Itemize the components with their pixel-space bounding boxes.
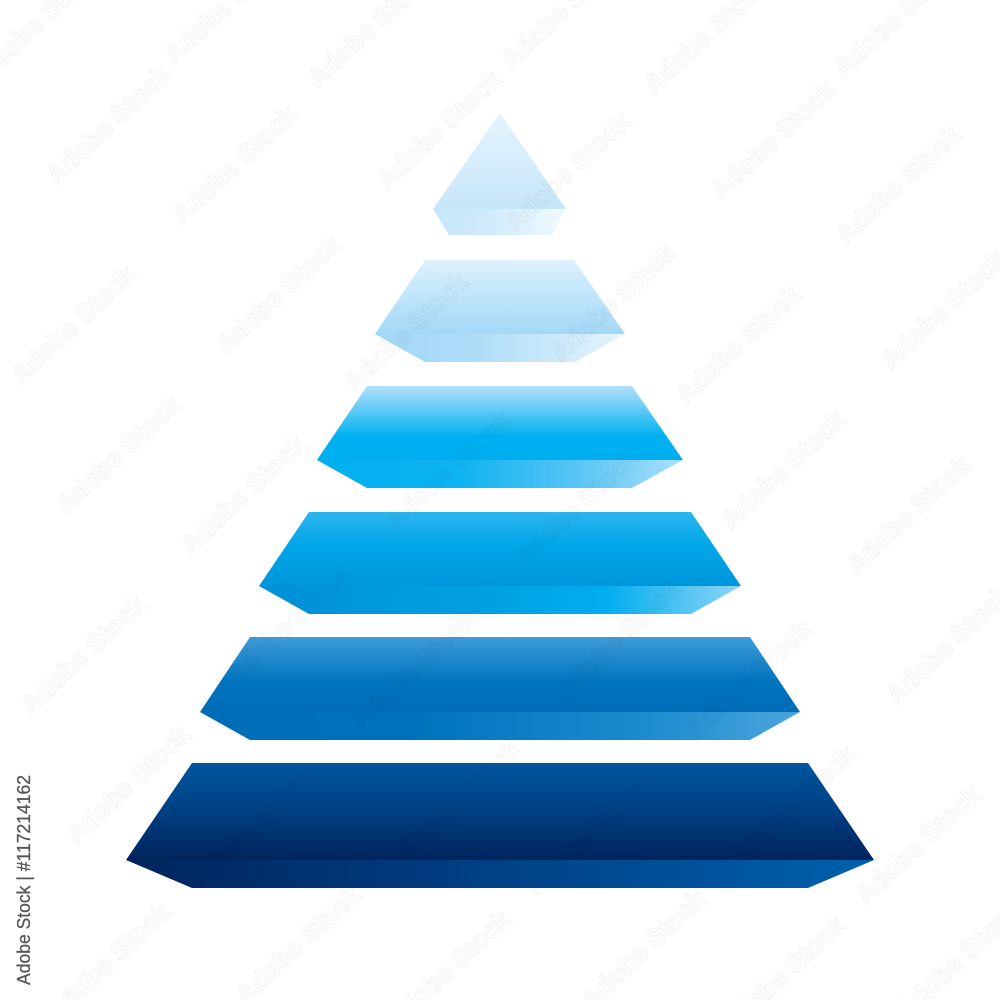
tier 3 bbox=[317, 386, 683, 488]
tier 1: apex bbox=[433, 113, 566, 235]
stock watermark pattern: Adobe Stock bbox=[210, 229, 347, 360]
stock watermark pattern: Adobe Stock bbox=[670, 279, 807, 410]
stock watermark pattern: Adobe Stock bbox=[508, 442, 645, 573]
stock watermark pattern: Adobe Stock bbox=[338, 266, 475, 397]
stock watermark pattern: Adobe Stock bbox=[705, 74, 842, 205]
stock watermark pattern: Adobe Stock bbox=[185, 762, 322, 893]
stock watermark pattern: Adobe Stock bbox=[840, 449, 977, 580]
stock watermark pattern: Adobe Stock bbox=[850, 779, 987, 910]
stock watermark pattern: Adobe Stock bbox=[550, 574, 687, 705]
stock watermark pattern: Adobe Stock bbox=[40, 59, 177, 190]
stock id caption: Adobe Stock | #117214162 bbox=[13, 775, 34, 985]
stock watermark pattern: Adobe Stock bbox=[345, 604, 482, 735]
stock watermark pattern: Adobe Stock bbox=[380, 404, 517, 535]
stock watermark pattern: Adobe Stock bbox=[725, 739, 862, 870]
stock watermark pattern: Adobe Stock bbox=[15, 589, 152, 720]
stock watermark pattern: Adobe Stock bbox=[220, 559, 357, 690]
tier 4 bbox=[259, 512, 741, 614]
stock watermark pattern: Adobe Stock bbox=[175, 429, 312, 560]
tier 2 bbox=[375, 260, 625, 362]
tier 6: base bbox=[126, 763, 874, 888]
stock watermark pattern: Adobe Stock bbox=[50, 389, 187, 520]
stock watermark pattern: Adobe Stock bbox=[390, 734, 527, 865]
stock watermark pattern: Adobe Stock bbox=[60, 719, 197, 850]
stock watermark pattern: Adobe Stock bbox=[715, 404, 852, 535]
stock watermark pattern: Adobe Stock bbox=[371, 64, 508, 195]
tier 5 bbox=[200, 637, 800, 740]
stock watermark pattern: Adobe Stock bbox=[166, 99, 303, 230]
stock watermark pattern: Adobe Stock bbox=[830, 119, 967, 250]
stock watermark pattern: Adobe Stock bbox=[520, 769, 657, 900]
stock watermark pattern: Adobe Stock bbox=[545, 237, 682, 368]
stock watermark pattern: Adobe Stock bbox=[5, 259, 142, 390]
stock watermark pattern: Adobe Stock bbox=[680, 614, 817, 745]
stock watermark pattern: Adobe Stock bbox=[500, 106, 637, 237]
